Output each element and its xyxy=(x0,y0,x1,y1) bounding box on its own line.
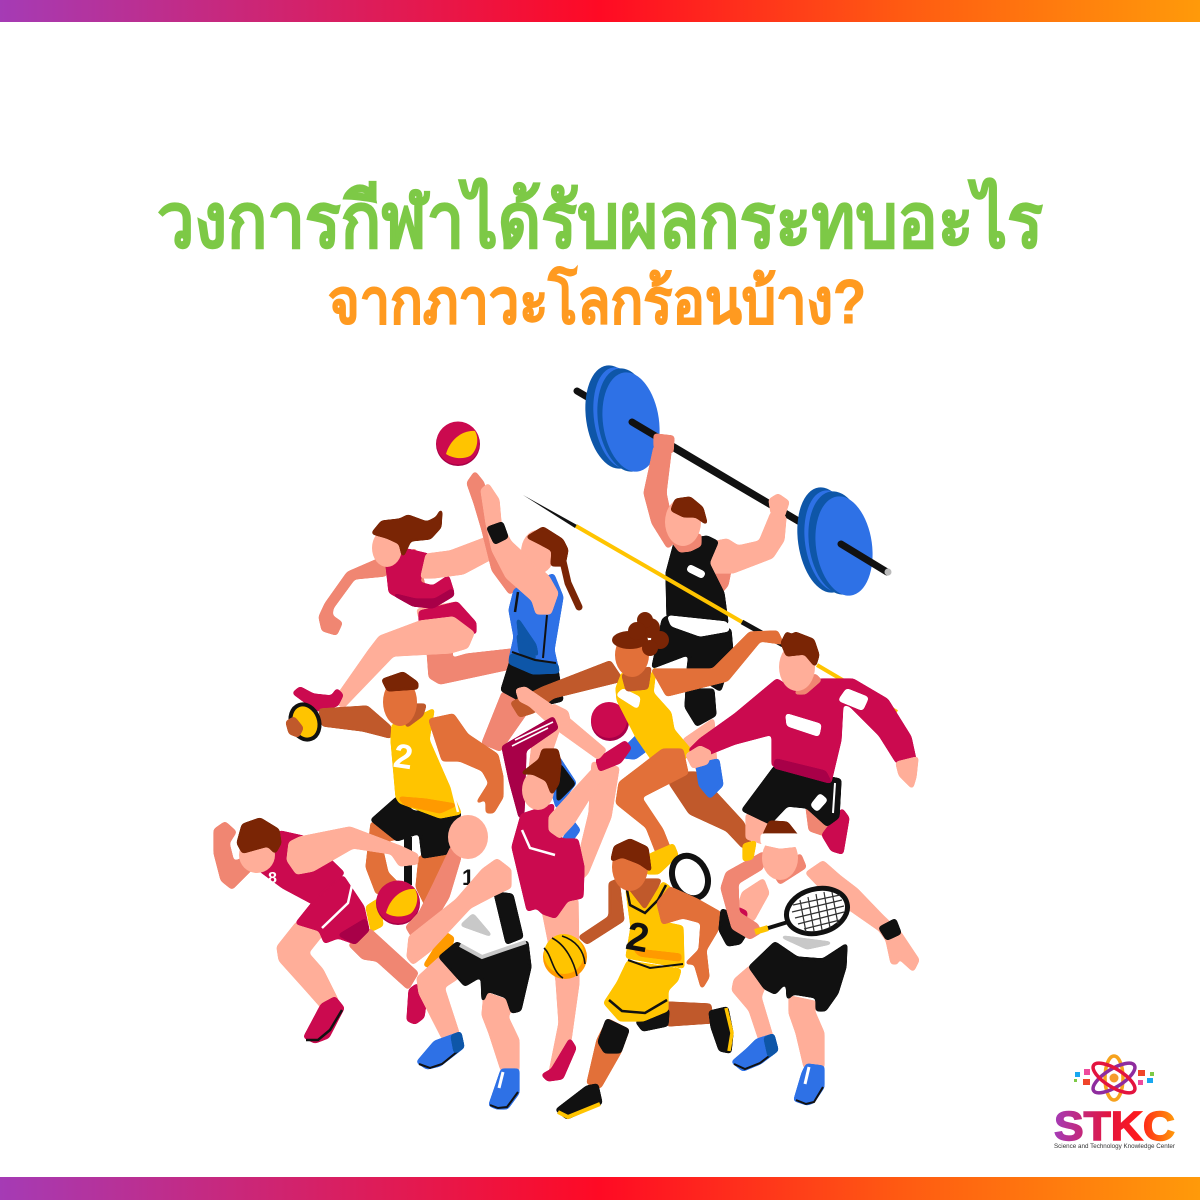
javelin xyxy=(523,495,897,712)
logo: STKC: Science and Technology Knowledge Center xyxy=(1054,1144,1175,1150)
number one player xyxy=(407,815,530,1108)
yellow javelin woman xyxy=(512,612,782,873)
yellow shoes behind ball xyxy=(367,900,453,967)
hurdler woman xyxy=(294,511,512,710)
number one player: 1 xyxy=(462,865,474,890)
gymnast xyxy=(503,688,630,1080)
runner xyxy=(215,819,425,1042)
logo: STKC: STKC xyxy=(1054,1103,1175,1149)
top gradient bar xyxy=(0,0,1200,22)
title xyxy=(157,177,1043,337)
basketball player: 2 xyxy=(623,914,652,961)
discus thrower: 2 xyxy=(391,737,415,777)
red ball xyxy=(591,702,629,741)
logo icon: atom xyxy=(1074,1056,1154,1100)
basketball player xyxy=(557,840,732,1118)
runner: 8 xyxy=(268,870,277,887)
volleyball xyxy=(436,422,480,466)
basketball xyxy=(543,934,587,979)
title line 2: จากภาวะโลกร้อนบ้าง? xyxy=(328,265,866,337)
weightlifter xyxy=(645,435,788,775)
discus thrower xyxy=(286,673,502,913)
title line 1: วงการกีฬาได้รับผลกระทบอะไร xyxy=(157,177,1043,264)
volleyball lower xyxy=(376,880,420,925)
crimson javelin player xyxy=(687,633,917,853)
barbell xyxy=(577,362,892,599)
bottom gradient bar xyxy=(0,1177,1200,1200)
volleyball player xyxy=(468,473,579,750)
tennis player xyxy=(720,822,918,1104)
logo: STKC xyxy=(1054,1056,1175,1150)
